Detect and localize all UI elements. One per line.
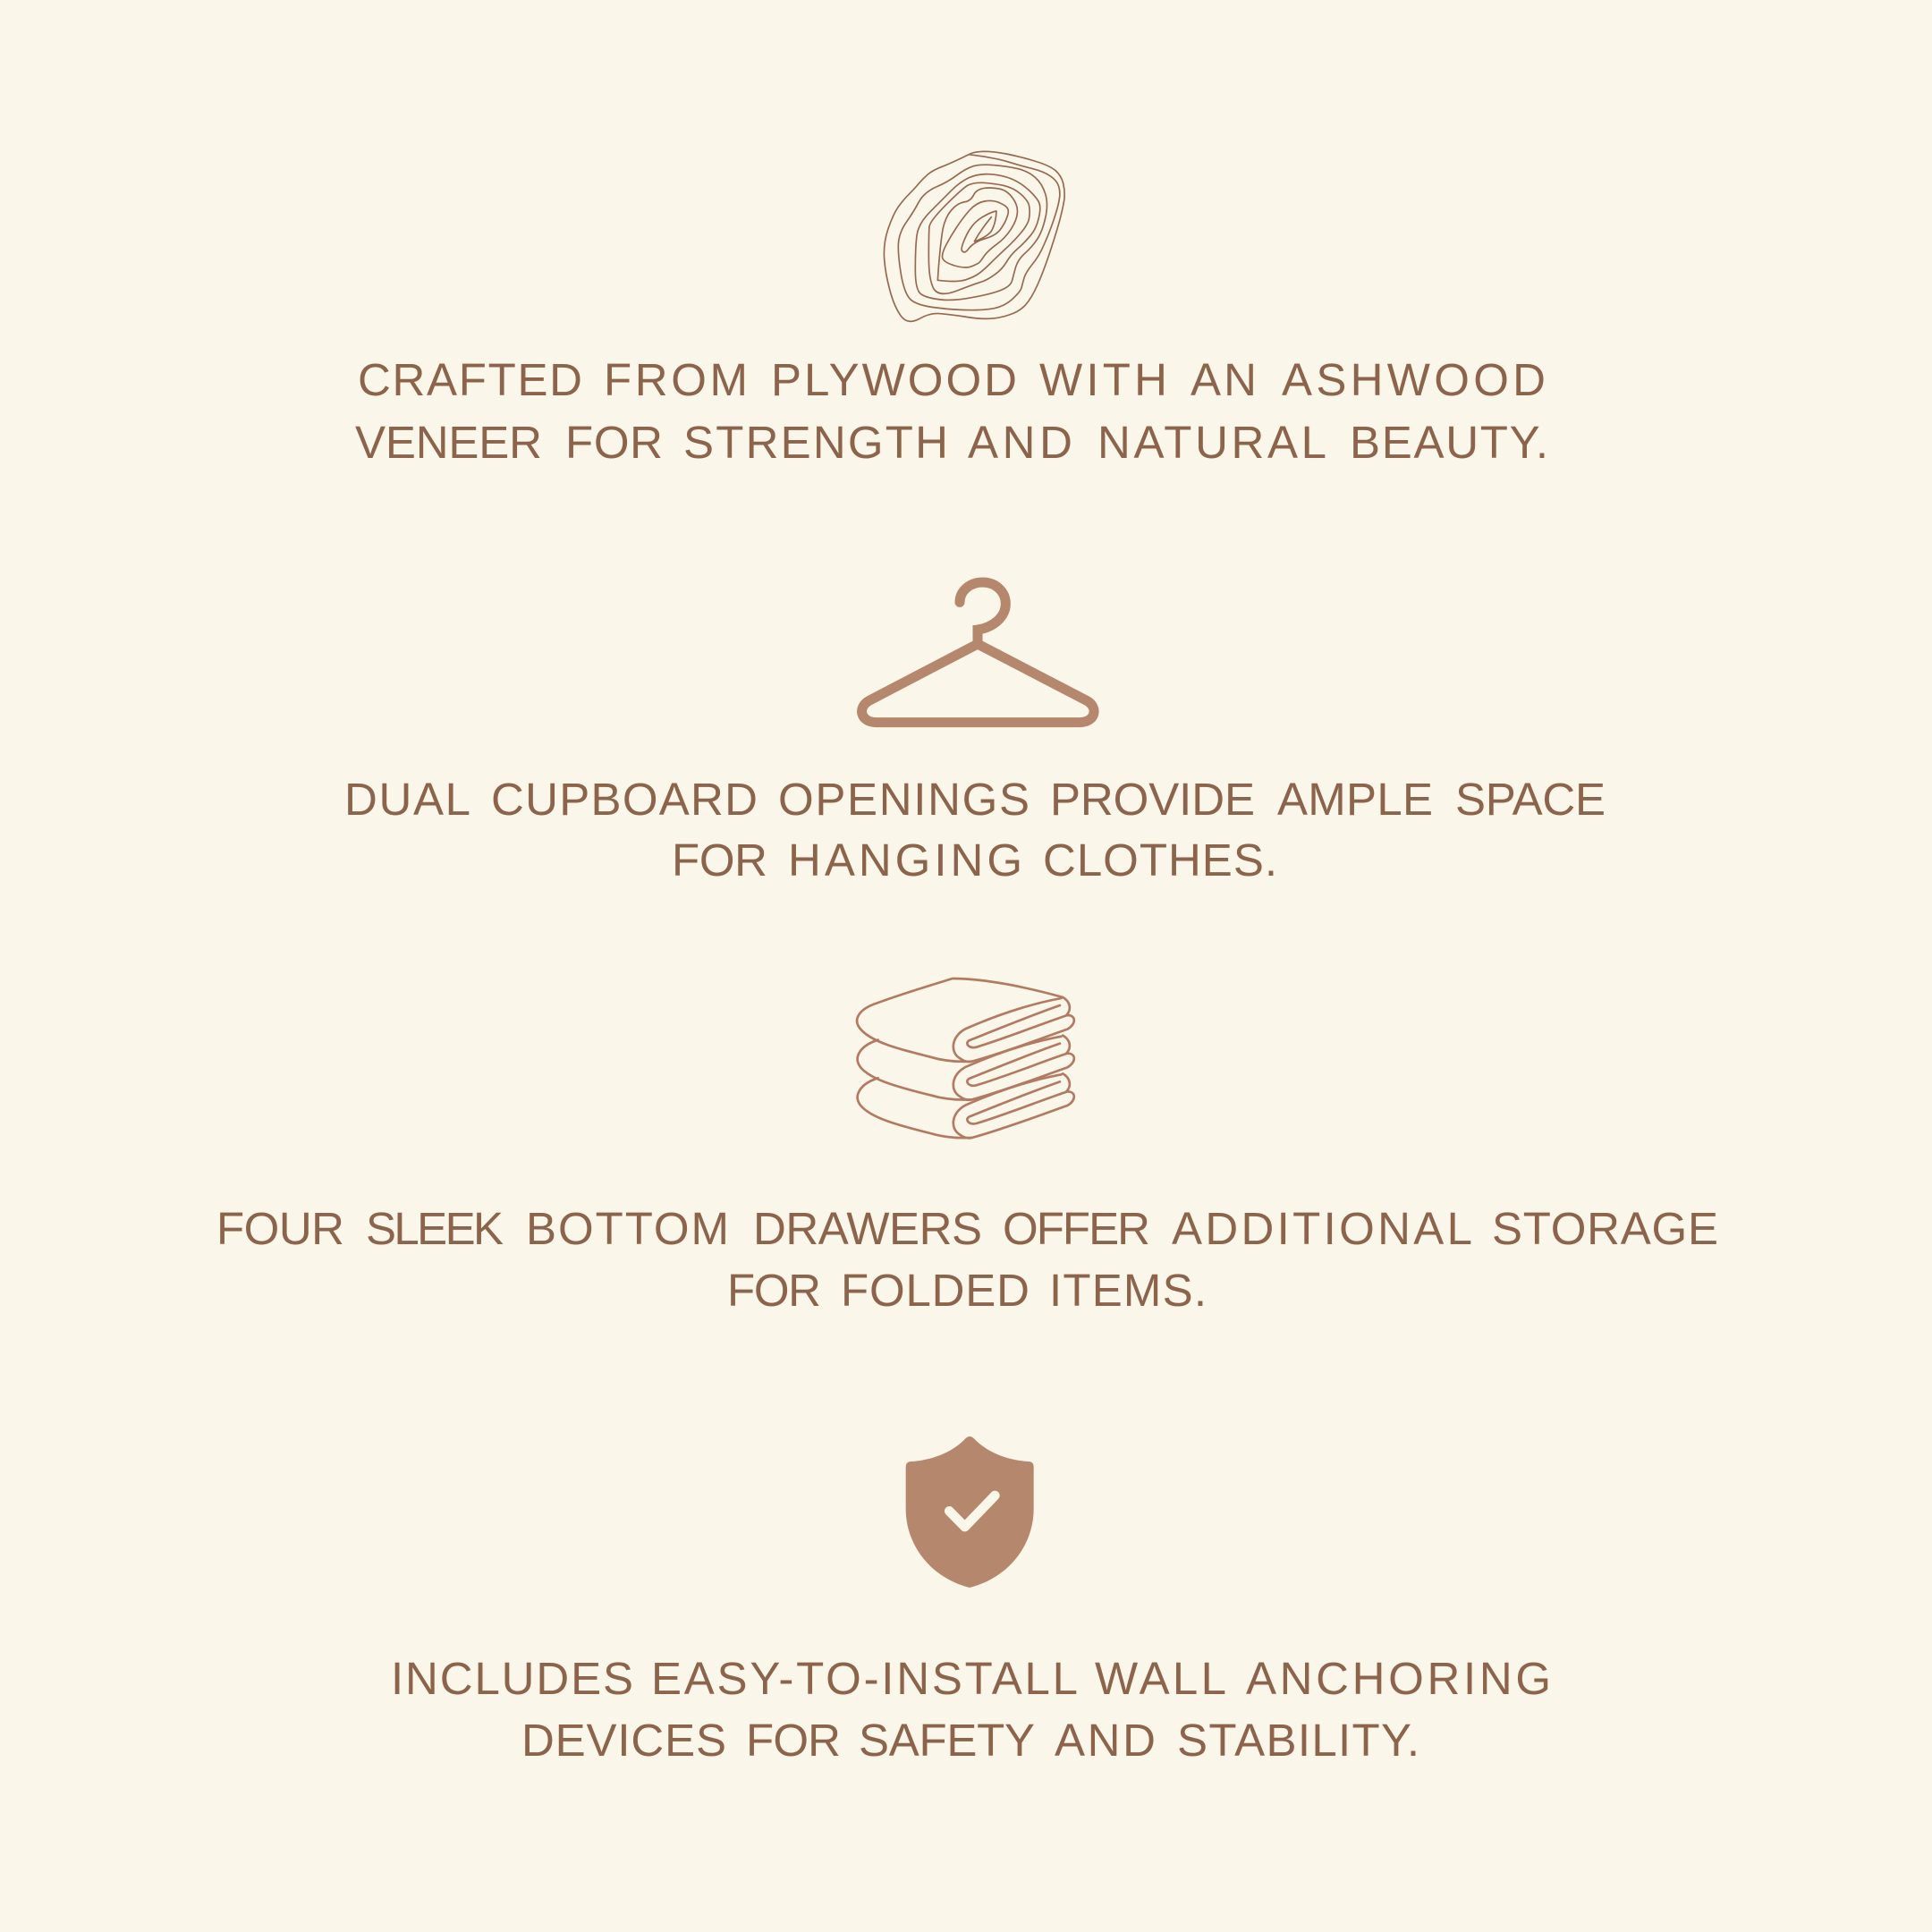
text: drawers description: ADDITIONAL bbox=[1172, 1203, 1472, 1254]
text: cupboard description: SPACE bbox=[1455, 774, 1606, 825]
text: safety description: ANCHORING bbox=[1246, 1653, 1551, 1704]
text: plywood description: ASHWOOD bbox=[1282, 354, 1546, 405]
text: safety description: EASY-TO-INSTALL bbox=[651, 1653, 1078, 1704]
text: plywood description: NATURAL bbox=[1097, 417, 1326, 468]
icon: clothes hanger bbox=[862, 582, 1094, 723]
text: drawers description bbox=[216, 1203, 1718, 1316]
bottom towel bbox=[858, 1073, 1074, 1138]
text: drawers description: SLEEK bbox=[366, 1203, 504, 1254]
text: drawers description: FOUR bbox=[216, 1203, 344, 1254]
text: plywood description: FOR bbox=[565, 417, 663, 468]
text: drawers description: OFFER bbox=[1003, 1203, 1150, 1254]
text: drawers description: BOTTOM bbox=[526, 1203, 729, 1254]
icon: shield with check mark bbox=[906, 1436, 1034, 1588]
text: cupboard description: CLOTHES. bbox=[1043, 835, 1277, 886]
text: cupboard description: FOR bbox=[672, 835, 767, 886]
text: safety description: DEVICES bbox=[521, 1715, 726, 1766]
text: cupboard description: DUAL bbox=[344, 774, 470, 825]
text: safety description: FOR bbox=[746, 1715, 841, 1766]
text: drawers description: FOR bbox=[727, 1265, 821, 1316]
text: plywood description: VENEER bbox=[355, 417, 542, 468]
text: plywood description: STRENGTH bbox=[683, 417, 948, 468]
text: drawers description: FOLDED bbox=[841, 1265, 1030, 1316]
text: drawers description: DRAWERS bbox=[753, 1203, 982, 1254]
text: cupboard description: AMPLE bbox=[1277, 774, 1433, 825]
text: plywood description: AND bbox=[968, 417, 1072, 468]
text: cupboard description: CUPBOARD bbox=[491, 774, 758, 825]
text: plywood description: CRAFTED bbox=[358, 354, 582, 405]
text: cupboard description bbox=[344, 774, 1606, 886]
text: plywood description: AN bbox=[1191, 354, 1257, 405]
text: safety description: AND bbox=[1055, 1715, 1156, 1766]
icon: wood grain rings bbox=[884, 151, 1064, 321]
top towel bbox=[857, 979, 1074, 1062]
text: safety description: WALL bbox=[1095, 1653, 1226, 1704]
text: safety description: INCLUDES bbox=[391, 1653, 633, 1704]
text: cupboard description: HANGING bbox=[788, 835, 1022, 886]
text: plywood description: BEAUTY. bbox=[1350, 417, 1548, 468]
text: safety description: SAFETY bbox=[859, 1715, 1035, 1766]
text: safety description bbox=[391, 1653, 1551, 1766]
text: drawers description: STORAGE bbox=[1492, 1203, 1718, 1254]
text: drawers description: ITEMS. bbox=[1049, 1265, 1207, 1316]
icon: stack of folded towels bbox=[857, 979, 1074, 1138]
text: plywood description: FROM bbox=[604, 354, 748, 405]
middle towel bbox=[858, 1036, 1074, 1100]
text: safety description: STABILITY. bbox=[1177, 1715, 1419, 1766]
text: plywood description: WITH bbox=[1039, 354, 1167, 405]
text: plywood description: PLYWOOD bbox=[771, 354, 1017, 405]
text: cupboard description: PROVIDE bbox=[1050, 774, 1255, 825]
text: cupboard description: OPENINGS bbox=[778, 774, 1030, 825]
text: plywood description bbox=[355, 354, 1548, 468]
